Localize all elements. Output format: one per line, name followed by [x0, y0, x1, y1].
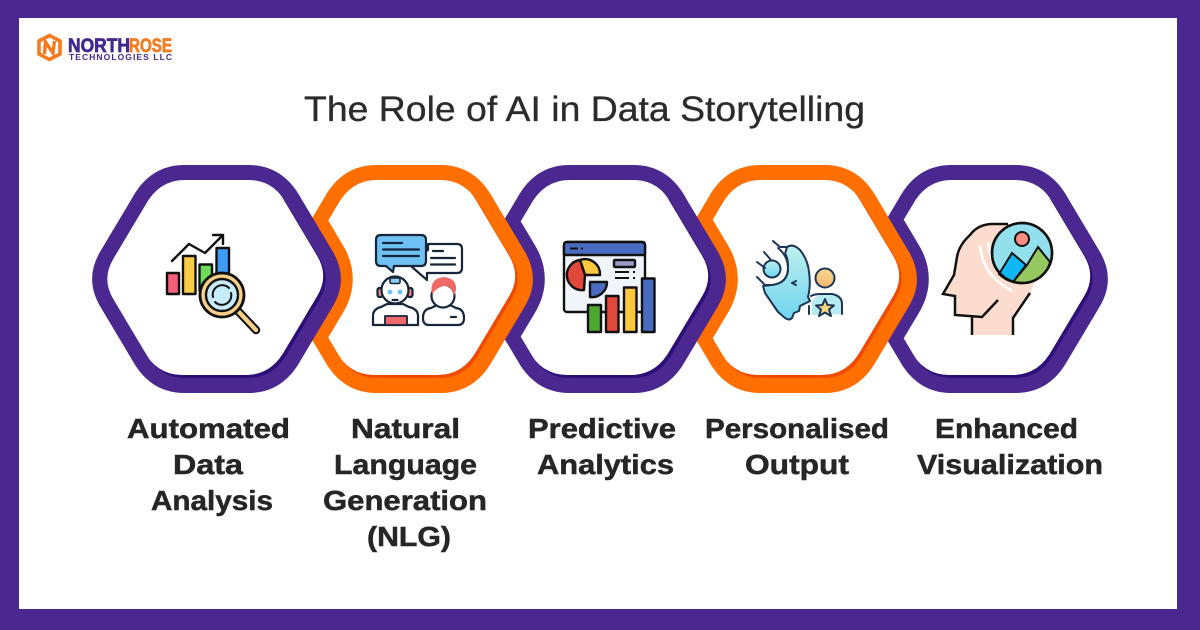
icon: head with landscape image	[943, 223, 1052, 335]
icon: bar chart with magnifier	[167, 235, 256, 330]
label: Automated Data Analysis: Automated	[127, 413, 290, 444]
icon: dashboard window with charts	[564, 242, 654, 332]
logo: Northrose Technologies: ROSE	[129, 36, 172, 57]
logo: Northrose Technologies	[39, 36, 172, 62]
label: Automated Data Analysis: Data	[173, 449, 243, 480]
hexagon 1: purple	[97, 170, 333, 386]
label: Natural Language Generation (NLG): Generation	[323, 485, 487, 516]
hexagon 2: orange	[312, 165, 533, 393]
label: Enhanced Visualization: Visualization	[917, 449, 1103, 480]
label: Natural Language Generation (NLG): Natural	[351, 413, 460, 444]
label: Enhanced Visualization: Enhanced	[935, 413, 1078, 444]
hexagon 4: orange	[697, 165, 917, 393]
logo: Northrose Technologies: NORTH	[68, 36, 130, 57]
label: Natural Language Generation (NLG)	[323, 413, 487, 552]
hexagon 3: purple	[505, 165, 726, 393]
hexagon 5: purple	[888, 165, 1108, 393]
label: Predictive Analytics: Analytics	[537, 449, 674, 480]
icon: AI face with personal avatar	[757, 241, 842, 320]
label: Personalised Output: Output	[745, 449, 849, 480]
logo: Northrose Technologies: TECHNOLOGIES LLC	[69, 52, 172, 62]
label: Automated Data Analysis: Analysis	[151, 485, 273, 516]
label: Natural Language Generation (NLG): (NLG)	[367, 521, 451, 552]
label: Enhanced Visualization	[917, 413, 1103, 480]
label: Automated Data Analysis	[127, 413, 290, 516]
icon: robot and person in conversation	[373, 235, 464, 325]
label: Personalised Output: Personalised	[705, 413, 889, 444]
label: Personalised Output	[705, 413, 889, 480]
label: Natural Language Generation (NLG): Language	[334, 449, 477, 480]
label: Predictive Analytics	[528, 413, 676, 480]
label: Predictive Analytics: Predictive	[528, 413, 676, 444]
title: The Role of AI in Data Storytelling	[304, 90, 865, 129]
